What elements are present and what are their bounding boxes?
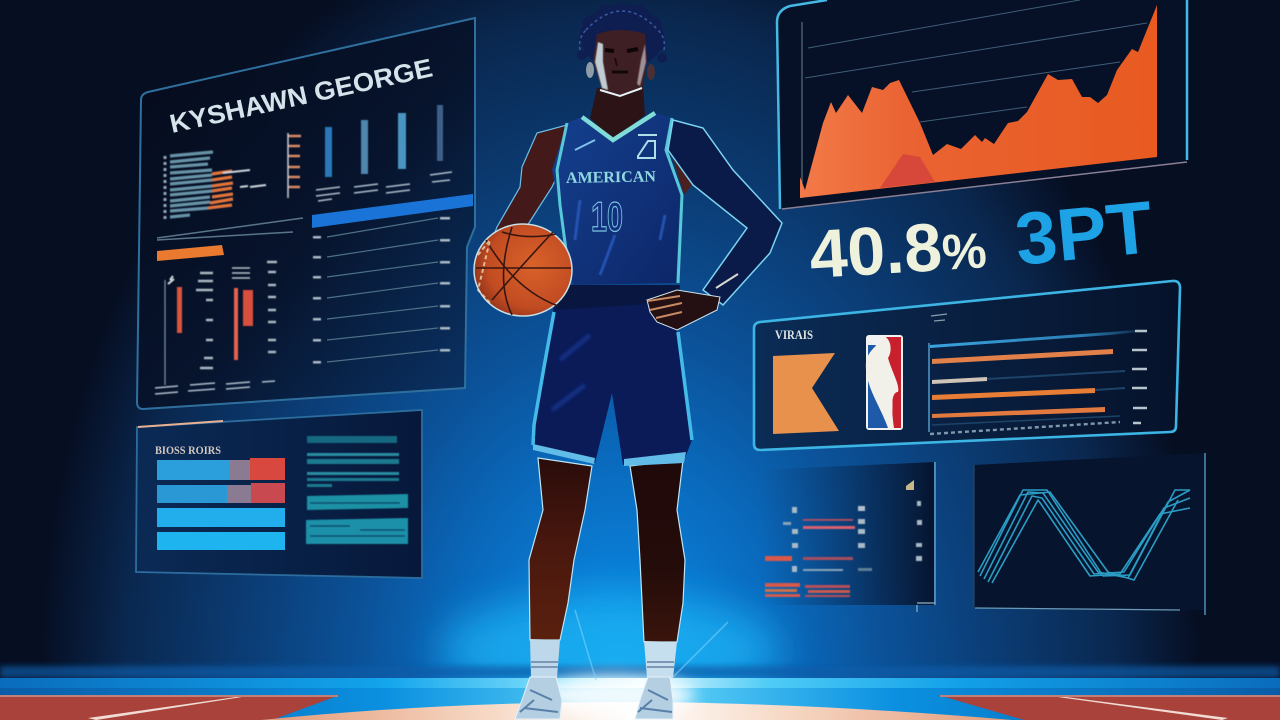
left arm: [492, 125, 567, 240]
panel label: VIRAIS: [775, 327, 813, 342]
socks: [530, 639, 677, 678]
text block: [306, 436, 408, 544]
skin under the right armpit: [672, 155, 692, 195]
stat label: 3PT: [1012, 185, 1156, 281]
jersey lettering: AMERICAN: [566, 168, 656, 187]
panel: wave line chart: [974, 453, 1205, 615]
stat: three point percentage: [807, 185, 1156, 293]
cyan and red bars: [157, 458, 285, 550]
basketball: [474, 224, 572, 316]
panel: player stats board with name: [137, 18, 475, 409]
legs: [529, 458, 685, 642]
jersey: [552, 113, 682, 285]
glow behind feet: [440, 595, 780, 705]
value labels: [1132, 331, 1147, 423]
horizontal bar chart: [929, 314, 1147, 434]
grid lines: [805, 0, 1147, 122]
panel: team and league bars: [754, 281, 1180, 450]
trend lines: [327, 218, 438, 362]
ears: [586, 62, 594, 78]
shoes: [515, 677, 673, 719]
jersey badge: [638, 135, 657, 158]
vertical chart columns: [155, 262, 277, 394]
panel: lower-left bars: [136, 410, 422, 578]
head: [577, 3, 667, 96]
neck: [590, 88, 645, 140]
icon: orange team mark: [773, 353, 839, 434]
icon: league logo: [866, 335, 903, 430]
court: right red zone: [938, 695, 1280, 720]
waistband: [555, 285, 680, 310]
hair: [577, 3, 667, 69]
face: [593, 30, 647, 95]
bar columns: [316, 105, 452, 201]
trend line value labels: [313, 217, 450, 364]
divider: [157, 218, 303, 240]
wristband: [716, 274, 738, 288]
shorts: [533, 300, 692, 466]
hand on hip: [647, 290, 720, 330]
table rows: [765, 501, 922, 597]
orange header line: [138, 421, 223, 427]
orange area series: [800, 5, 1157, 198]
right arm with sleeve: [668, 120, 782, 305]
red inner series: [880, 154, 935, 188]
panel: area chart: [777, 0, 1187, 209]
list of stat rows: [165, 152, 266, 220]
court: left red zone: [0, 695, 340, 720]
small label column: [288, 133, 301, 198]
jersey number: 10: [591, 193, 623, 240]
panel label: BIOSS ROIRS: [155, 443, 221, 457]
court: center circle: [261, 702, 1012, 720]
blue header bar: [312, 194, 473, 228]
orange progress bar: [157, 245, 224, 261]
wave lines: [978, 490, 1190, 583]
heading: player name: KYSHAWN GEORGE: [167, 52, 435, 139]
white glow at center: [535, 675, 695, 715]
floor and glow: [0, 595, 1280, 720]
player figure: [474, 3, 782, 719]
icon: small marker: [906, 480, 914, 490]
stat value: 40.8%: [807, 206, 988, 293]
panel: table with red rows: [760, 462, 935, 612]
